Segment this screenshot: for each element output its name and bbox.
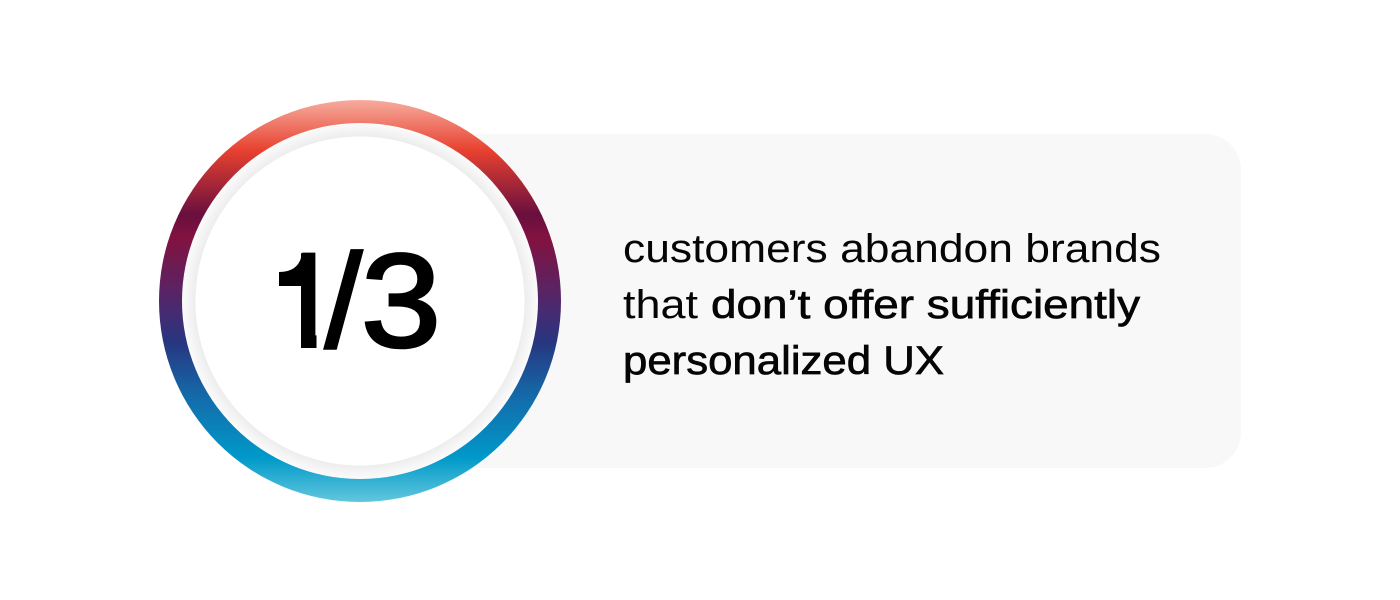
line 2: don’t offer sufficiently [711,283,1140,327]
ring: vertical gradient [159,100,561,502]
line 1: customers abandon brands [623,227,1161,271]
ring: grey bevel [182,123,538,479]
gradient ring badge [159,100,561,502]
badge: white centre [196,136,524,466]
statistic: 1/3: / [325,228,362,376]
line 3: personalized UX [623,339,944,383]
line 2: that [623,283,698,327]
statistic: 1/3 [279,249,436,350]
statistic: 1/3: 3 [361,228,441,376]
statistic: 1/3: 1 [268,225,343,376]
text block: statistic description [623,227,1161,383]
panel: text card [400,134,1241,468]
